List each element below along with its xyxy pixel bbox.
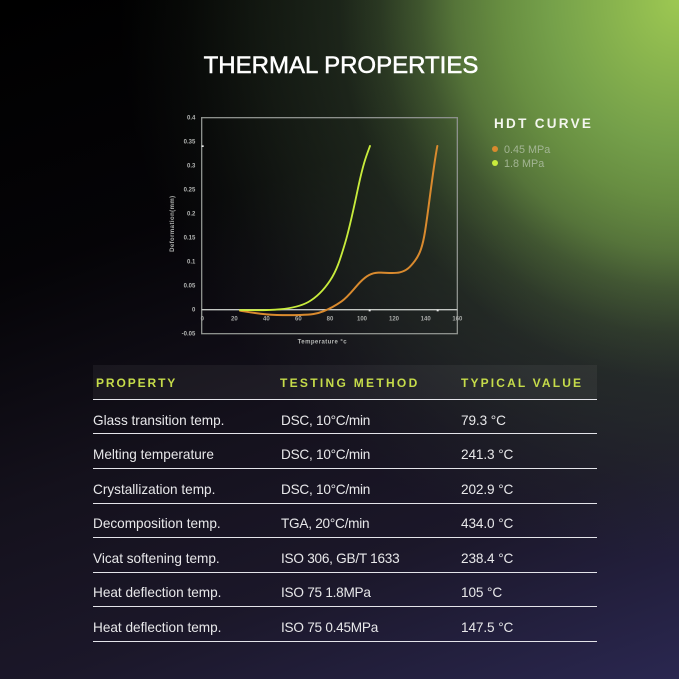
row: decomposition: Decomposition temp. [93,516,221,531]
row: glass transition: DSC, 10°C/min [281,413,370,428]
x axis tick labels: 140 [421,316,431,322]
chart: HDT deformation versus temperature [170,115,463,345]
row: heat deflection 0.45 MPa: 147.5 °C [461,620,513,635]
row: decomposition: TGA, 20°C/min [281,516,369,531]
row: melting [93,447,513,462]
row: glass transition: 79.3 °C [461,413,506,428]
curve: 1.8 MPa [240,146,370,310]
x axis tick labels [201,316,463,322]
x axis tick labels: 0 [201,316,205,322]
row: heat deflection 1.8 MPa: ISO 75 1.8MPa [281,585,371,600]
legend heading: HDT CURVE [494,116,593,131]
y axis tick labels: 0.15 [184,236,196,242]
row: vicat [93,551,513,566]
x axis title: Temperature °c [298,339,347,345]
x axis tick labels: 100 [357,316,368,322]
row: heat deflection 1.8 MPa: 105 °C [461,585,502,600]
row: crystallization: 202.9 °C [461,482,513,497]
x axis tick labels: 80 [327,316,334,322]
legend [492,116,593,170]
row: crystallization [93,482,513,497]
zero axis [202,308,457,312]
header: testing method: TESTING METHOD [280,376,420,390]
y axis tick labels: 0 [192,308,196,314]
y axis tick labels: 0.25 [184,188,196,194]
y axis tick labels [182,115,196,338]
row: decomposition [93,516,513,531]
y axis tick labels: 0.3 [187,164,196,170]
y axis title: Deformation(mm) [170,195,176,252]
y axis tick labels: -0.05 [182,332,196,338]
table header band [93,365,597,399]
row: glass transition: Glass transition temp. [93,413,224,428]
x axis tick labels: 160 [452,316,463,322]
row: vicat: 238.4 °C [461,551,513,566]
x axis tick labels: 20 [231,316,238,322]
y axis tick labels: 0.4 [187,115,196,121]
row: melting: Melting temperature [93,447,214,462]
row: heat deflection 0.45 MPa: Heat deflection temp. [93,620,221,635]
row: decomposition: 434.0 °C [461,516,513,531]
legend item: 0.45 MPa: 0.45 MPa [504,144,550,156]
row: heat deflection 0.45 MPa [93,620,513,635]
row: glass transition [93,413,506,428]
title: THERMAL PROPERTIES [204,52,478,79]
row: vicat: ISO 306, GB/T 1633 [281,551,399,566]
curve: 0.45 MPa [240,146,437,315]
y axis tick labels: 0.35 [184,140,196,146]
row: vicat: Vicat softening temp. [93,551,220,566]
y axis tick labels: 0.05 [184,284,196,290]
legend item: 1.8 MPa: 1.8 MPa [504,158,544,170]
data end markers [202,145,439,311]
x axis tick labels: 60 [295,316,302,322]
row: melting: 241.3 °C [461,447,513,462]
row: heat deflection 0.45 MPa: ISO 75 0.45MPa [281,620,378,635]
y axis tick labels: 0.2 [187,212,196,218]
plot frame [202,118,457,334]
header: property: PROPERTY [96,376,177,390]
row: crystallization: Crystallization temp. [93,482,215,497]
row: heat deflection 1.8 MPa [93,585,502,600]
y axis tick labels: 0.1 [187,260,196,266]
header: typical value: TYPICAL VALUE [461,376,583,390]
row: heat deflection 1.8 MPa: Heat deflection temp. [93,585,221,600]
x axis tick labels: 40 [263,316,270,322]
row: crystallization: DSC, 10°C/min [281,482,370,497]
row: melting: DSC, 10°C/min [281,447,370,462]
x axis tick labels: 120 [389,316,400,322]
